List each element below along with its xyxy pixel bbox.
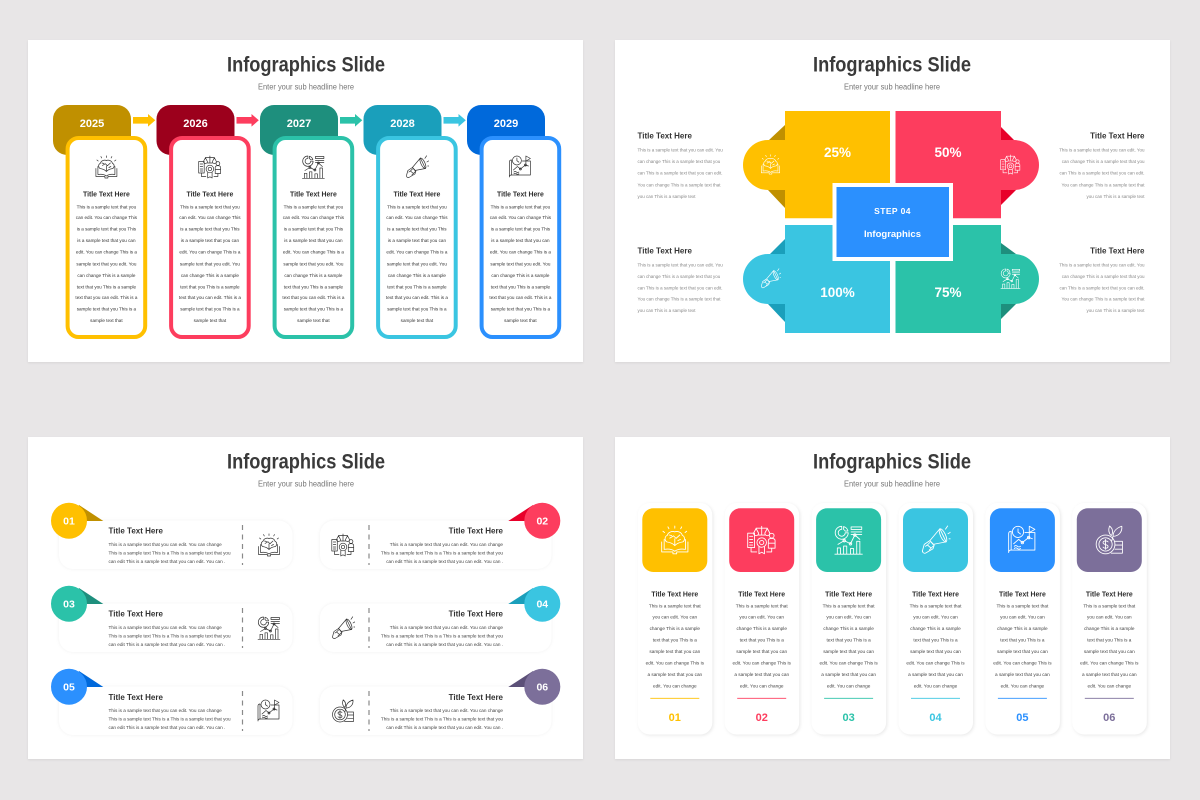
card 2028: text that you This is a sample: [387, 284, 447, 290]
item 03: This is a sample text that you can edit. You can change: [108, 625, 222, 630]
item 01: [51, 503, 292, 569]
card 2027: sample text that you This is a: [284, 306, 344, 312]
column 04: a sample text that you can: [908, 672, 963, 677]
text block: top left: [638, 132, 723, 199]
year tab 2028: 2028: [390, 118, 415, 130]
column 05: edit. You can change This is: [993, 661, 1052, 666]
column 04: edit. You can change: [914, 684, 958, 689]
card 2029: sample text that you edit. You: [490, 261, 551, 266]
arrow 2: [236, 114, 259, 127]
card 2029: sample text that you This is a: [491, 306, 551, 312]
card 2028: can change This is a sample: [388, 273, 446, 278]
card 2026: Title Text Here: [186, 191, 233, 198]
item 02: This is a sample text This is a This is a sample text that you: [381, 550, 503, 555]
item 02: can edit This is a sample text that you can edit. You can .: [386, 559, 503, 564]
card 2029: This is a sample text that you: [491, 204, 551, 209]
text block: bottom left: [638, 246, 723, 313]
item 03: can edit This is a sample text that you can edit. You can .: [108, 642, 225, 647]
item 06: can edit This is a sample text that you can edit. You can .: [386, 725, 503, 730]
panel: four-part puzzle slide: [615, 40, 1170, 362]
item 06: 06: [536, 682, 548, 694]
title: slide 3: Infographics Slide: [227, 450, 385, 474]
card 2026: sample text that you This is a: [180, 306, 240, 312]
card 2027: text that you This is a sample: [284, 284, 344, 290]
text block: top left: you can This is a sample text: [638, 194, 696, 199]
year tab 2027: [260, 105, 338, 155]
text block: top right: This is a sample text that you can edit. You: [1059, 148, 1145, 153]
column 02: 02: [756, 712, 768, 724]
card 2026: edit. You can change This is a: [179, 250, 241, 255]
text block: top right: [1059, 132, 1145, 199]
item 05: [51, 669, 292, 735]
column 01: Title Text Here: [651, 592, 698, 598]
card 2029: can edit. You can change This: [490, 215, 552, 220]
column 06: This is a sample text that: [1083, 603, 1136, 608]
text block: top right: Title Text Here: [1090, 132, 1145, 140]
column 05: [985, 503, 1060, 734]
text block: bottom right: [1059, 246, 1145, 313]
year tab 2027: 2027: [287, 118, 311, 130]
column 05: change This is a sample: [997, 626, 1048, 631]
year tab 2028: [364, 105, 442, 155]
item 01: This is a sample text This is a This is a sample text that you: [108, 550, 231, 555]
column 03: you can edit. You can: [826, 615, 871, 620]
column 06: Title Text Here: [1086, 592, 1133, 598]
text block: top left: You can change This is a sample text that: [638, 182, 721, 187]
subtitle: slide 1: Enter your sub headline here: [258, 82, 355, 92]
text block: top left: This is a sample text that you can edit. You: [638, 148, 723, 153]
year tab 2026: 2026: [183, 118, 208, 130]
text block: top left: can change This is a sample text that you: [638, 159, 721, 164]
column 03: a sample text that you can: [821, 672, 876, 677]
text block: bottom right: you can This is a sample text: [1087, 308, 1145, 313]
arrow 1: [133, 114, 155, 127]
column 04: change This is a sample: [910, 626, 961, 631]
text block: top left: Title Text Here: [638, 132, 692, 140]
item 01: 01: [63, 516, 75, 528]
item 05: can edit This is a sample text that you can edit. You can .: [108, 725, 225, 730]
text block: bottom left: You can change This is a sample text that: [638, 296, 721, 302]
card 2026: sample text that you edit. You: [180, 261, 240, 266]
item 04: 04: [536, 598, 548, 610]
column 05: text that you This is a: [1000, 637, 1045, 642]
card 2026: sample text that: [194, 318, 227, 323]
card 2027: This is a sample text that you: [284, 204, 344, 209]
text block: top right: you can This is a sample text: [1087, 194, 1145, 199]
column 02: change This is a sample: [736, 626, 787, 631]
column 03: sample text that you can: [823, 649, 874, 654]
text block: bottom left: you can This is a sample text: [638, 308, 696, 313]
card 2029: Title Text Here: [497, 191, 544, 198]
column 01: [638, 503, 712, 734]
item 06: [320, 669, 560, 735]
column 05: 05: [1016, 712, 1029, 724]
card 2028: [378, 138, 456, 337]
column 03: edit. You can change: [827, 684, 871, 689]
column 04: Title Text Here: [912, 592, 959, 598]
text block: bottom left: This is a sample text that you can edit. You: [638, 262, 723, 268]
year tab 2025: [53, 105, 131, 155]
column 05: This is a sample text that: [996, 603, 1049, 608]
card 2026: can change This is a sample: [181, 273, 239, 278]
column 01: 01: [669, 712, 681, 724]
card 2025: This is a sample text that you: [77, 204, 137, 209]
column 05: a sample text that you can: [995, 672, 1050, 677]
card 2029: [482, 138, 559, 337]
item 04: [320, 586, 560, 652]
column 03: edit. You can change This is: [819, 661, 878, 666]
column 02: sample text that you can: [736, 649, 787, 654]
card 2025: sample text that: [90, 318, 123, 323]
column 05: Title Text Here: [999, 592, 1046, 598]
card 2029: edit. You can change This is a: [490, 250, 551, 255]
item 03: 03: [63, 598, 75, 610]
column 03: This is a sample text that: [823, 603, 875, 608]
column 01: edit. You can change: [653, 684, 697, 689]
column 04: This is a sample text that: [910, 603, 962, 608]
item 01: Title Text Here: [108, 526, 163, 536]
column 05: you can edit. You can: [1000, 615, 1045, 620]
column 06: text that you This is a: [1087, 637, 1132, 642]
card 2028: Title Text Here: [393, 191, 440, 198]
card 2027: sample text that: [297, 318, 330, 323]
puzzle piece 25%: 25%: [824, 145, 851, 160]
puzzle piece 75%: 75%: [934, 285, 962, 300]
title: slide 1: Infographics Slide: [227, 54, 385, 76]
column 06: a sample text that you can: [1082, 672, 1137, 677]
card 2026: is a sample text that you can: [181, 238, 239, 243]
column 03: text that you This is a: [826, 637, 871, 642]
year tab 2029: [467, 105, 545, 155]
panel: six column slide: [615, 437, 1170, 759]
card 2027: sample text that you edit. You: [283, 261, 344, 266]
text block: top right: You can change This is a sample text that: [1061, 182, 1145, 187]
text block: top right: can This is a sample text that you can edit.: [1060, 171, 1144, 176]
card 2026: can edit. You can change This: [179, 215, 241, 220]
column 02: a sample text that you can: [734, 672, 789, 677]
item 06: This is a sample text that you can edit. You can change: [390, 708, 503, 713]
item 06: Title Text Here: [449, 693, 504, 702]
item 05: This is a sample text that you can edit. You can change: [108, 708, 222, 713]
title: slide 4: Infographics Slide: [813, 450, 971, 474]
text block: bottom left: can This is a sample text that you can edit.: [638, 286, 722, 290]
item 01: This is a sample text that you can edit. You can change: [108, 542, 222, 547]
column 04: [898, 503, 973, 734]
card 2027: edit. You can change This is a: [283, 250, 344, 255]
arrow 3: [340, 114, 362, 127]
card 2026: text that you This is a sample: [180, 284, 240, 290]
column 02: edit. You can change This is: [733, 661, 791, 666]
column 03: change This is a sample: [823, 626, 874, 631]
item 04: can edit This is a sample text that you can edit. You can .: [386, 642, 503, 647]
puzzle piece 50%: 50%: [934, 145, 962, 160]
card 2028: is a sample text that you This: [387, 227, 447, 232]
card 2029: text that you This is a sample: [491, 284, 551, 290]
column 04: you can edit. You can: [913, 615, 958, 620]
center box: step 04: Infographics: [864, 229, 921, 240]
card 2028: can edit. You can change This: [386, 215, 448, 220]
card 2026: This is a sample text that you: [180, 204, 240, 209]
card 2025: can edit. You can change This: [76, 215, 138, 220]
column 01: edit. You can change This is: [646, 661, 705, 666]
text block: bottom left: Title Text Here: [638, 246, 692, 256]
column 05: sample text that you can: [997, 649, 1048, 654]
card 2026: text that you can edit. This is a: [179, 295, 241, 300]
column 04: edit. You can change This is: [906, 661, 965, 666]
card 2027: is a sample text that you can: [284, 238, 343, 243]
year tab 2026: [156, 105, 234, 155]
item 05: This is a sample text This is a This is a sample text that you: [108, 716, 231, 721]
item 05: 05: [63, 682, 75, 694]
column 03: Title Text Here: [825, 592, 872, 598]
column 06: edit. You can change: [1088, 684, 1131, 689]
column 02: text that you This is a: [740, 637, 784, 642]
item 04: This is a sample text that you can edit. You can change: [390, 625, 503, 630]
column 06: [1072, 503, 1147, 734]
item 04: This is a sample text This is a This is a sample text that you: [381, 633, 503, 638]
text block: bottom right: Title Text Here: [1090, 246, 1145, 256]
item 03: [51, 586, 292, 652]
puzzle piece 100%: 100%: [820, 285, 855, 300]
item 03: Title Text Here: [108, 610, 163, 619]
card 2025: is a sample text that you This: [77, 227, 137, 232]
column 05: edit. You can change: [1001, 684, 1045, 689]
column 01: you can edit. You can: [653, 615, 697, 620]
column 04: sample text that you can: [910, 649, 961, 654]
card 2029: sample text that: [504, 318, 537, 323]
card 2028: This is a sample text that you: [387, 204, 447, 209]
panel: numbered list slide: [28, 437, 583, 759]
column 01: a sample text that you can: [647, 672, 703, 677]
card 2027: can change This is a sample: [284, 273, 343, 278]
card 2029: text that you can edit. This is a: [489, 295, 552, 300]
center box: step 04: [834, 185, 951, 259]
card 2025: can change This is a sample: [77, 273, 136, 278]
item 03: This is a sample text This is a This is a sample text that you: [108, 633, 231, 638]
column 06: edit. You can change This is: [1080, 661, 1139, 666]
item 06: This is a sample text This is a This is a sample text that you: [381, 716, 503, 721]
column 01: This is a sample text that: [649, 603, 701, 608]
item 04: Title Text Here: [449, 610, 504, 619]
item 02: [320, 503, 560, 569]
subtitle: slide 2: Enter your sub headline here: [844, 82, 941, 92]
card 2028: sample text that you This is a: [387, 306, 447, 312]
year tab 2029: 2029: [494, 118, 518, 130]
column 02: edit. You can change: [740, 684, 784, 689]
column 01: change This is a sample: [650, 626, 700, 631]
puzzle piece 50%: [896, 111, 1039, 218]
card 2027: is a sample text that you This: [284, 227, 344, 232]
card 2025: sample text that you edit. You: [76, 261, 137, 266]
year tab 2025: 2025: [80, 118, 104, 130]
card 2025: Title Text Here: [83, 191, 130, 198]
card 2028: sample text that: [401, 318, 434, 323]
card 2025: sample text that you This is a: [77, 306, 137, 312]
puzzle piece 25%: [743, 111, 890, 218]
item 02: This is a sample text that you can edit. You can change: [390, 542, 503, 547]
card 2025: text that you This is a sample: [77, 284, 137, 290]
item 05: Title Text Here: [108, 693, 163, 702]
text block: bottom right: This is a sample text that you can edit. You: [1059, 262, 1145, 268]
card 2028: is a sample text that you can: [388, 238, 446, 243]
column 01: text that you This is a: [653, 637, 697, 642]
card 2029: can change This is a sample: [491, 273, 550, 278]
card 2027: text that you can edit. This is a: [282, 295, 345, 300]
card 2026: is a sample text that you This: [180, 227, 240, 232]
card 2026: [171, 138, 249, 337]
text block: bottom right: You can change This is a sample text that: [1061, 296, 1145, 302]
card 2028: sample text that you edit. You: [387, 261, 447, 266]
item 01: can edit This is a sample text that you can edit. You can .: [108, 559, 225, 564]
panel: timeline slide: [28, 40, 583, 362]
card 2029: is a sample text that you can: [491, 238, 550, 243]
column 03: 03: [842, 712, 855, 724]
column 04: text that you This is a: [913, 637, 958, 642]
arrow 4: [444, 114, 466, 127]
card 2027: can edit. You can change This: [283, 215, 345, 220]
text block: bottom left: can change This is a sample text that you: [638, 274, 721, 279]
title: slide 2: Infographics Slide: [813, 54, 971, 76]
column 04: 04: [929, 712, 942, 724]
card 2025: edit. You can change This is a: [76, 250, 137, 255]
card 2025: text that you can edit. This is a: [75, 295, 138, 300]
text block: top right: can change This is a sample text that you: [1062, 159, 1145, 164]
text block: top left: can This is a sample text that you can edit.: [638, 171, 722, 176]
item 02: 02: [536, 516, 548, 528]
puzzle piece 75%: [896, 225, 1039, 333]
card 2025: [68, 138, 145, 337]
column 02: [725, 503, 799, 734]
column 02: This is a sample text that: [736, 603, 788, 608]
item 02: Title Text Here: [449, 526, 504, 536]
subtitle: slide 3: Enter your sub headline here: [258, 480, 355, 488]
text block: bottom right: can This is a sample text that you can edit.: [1060, 286, 1144, 290]
card 2028: text that you can edit. This is a: [386, 295, 448, 300]
card 2029: is a sample text that you This: [491, 227, 551, 232]
card 2027: Title Text Here: [290, 191, 337, 198]
subtitle: slide 4: Enter your sub headline here: [844, 480, 941, 488]
puzzle piece 100%: [743, 225, 890, 333]
column 06: 06: [1103, 712, 1115, 724]
card 2028: edit. You can change This is a: [386, 250, 448, 255]
column 02: you can edit. You can: [739, 615, 784, 620]
card 2027: [275, 138, 352, 337]
column 06: change This is a sample: [1084, 626, 1135, 631]
text block: bottom right: can change This is a sample text that you: [1062, 274, 1145, 279]
column 06: sample text that you can: [1084, 649, 1135, 654]
card 2025: is a sample text that you can: [77, 238, 136, 243]
column 01: sample text that you can: [649, 649, 701, 654]
column 06: you can edit. You can: [1087, 615, 1132, 620]
column 03: [812, 503, 886, 734]
center box: step 04: STEP 04: [874, 206, 911, 216]
column 02: Title Text Here: [738, 592, 785, 598]
